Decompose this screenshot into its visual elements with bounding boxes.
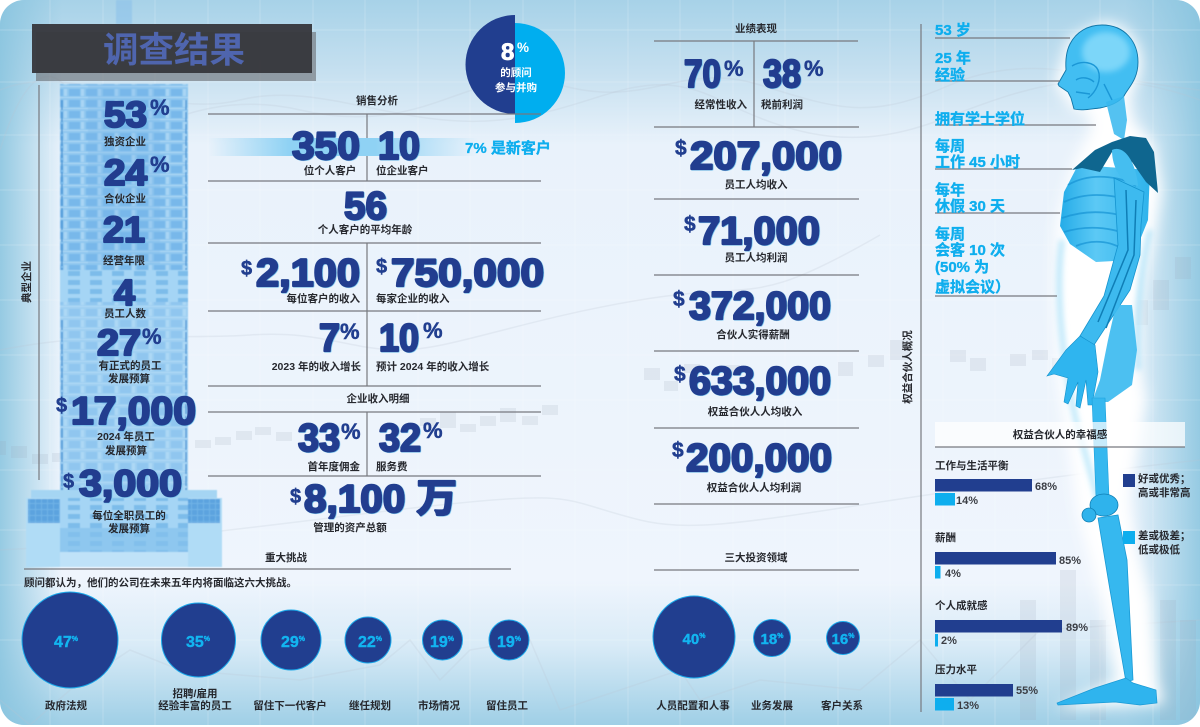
stat: $2,100 per client: 2,100: [256, 252, 360, 295]
foot: [1057, 678, 1157, 705]
panel: top challenges: 重大挑战: [265, 551, 307, 564]
bars: personal fulfilment: 2%: [941, 635, 957, 647]
stat: $8.1M AUM: 8,100 万: [304, 478, 457, 521]
stat: $3,000: 每位全职员工的: [92, 509, 166, 522]
callout: 8% M&A circle: 的顾问: [500, 66, 532, 79]
stat: $633,000: 权益合伙人人均收入: [708, 405, 803, 418]
stat: $17,000: $: [56, 395, 67, 417]
stat: 33% first-year commission: %: [341, 419, 361, 444]
bubble: 40% staffing: 40: [683, 631, 699, 648]
stat: $750,000 per firm: 每家企业的收入: [376, 292, 450, 305]
bubble: 19% market: 市场情况: [418, 699, 460, 712]
bubble: 22% succession: [345, 617, 391, 712]
legend: negative: 差或极差；: [1138, 529, 1190, 542]
stat: 53% sole: 53: [104, 94, 147, 135]
bubble: 22% succession: %: [376, 636, 383, 643]
head: [1058, 25, 1138, 110]
stat: 32% fees: 32: [379, 417, 421, 460]
stat: $750,000 per firm: 750,000: [391, 252, 544, 295]
callout: 8% M&A circle: 8: [501, 39, 514, 66]
ribs: [1062, 177, 1138, 252]
bubble: 16% client relations: 16: [832, 631, 848, 648]
bubble: 19% market: %: [448, 636, 455, 643]
stat: 27% budget: 有正式的员工: [98, 359, 162, 372]
stat: 56 average age: [318, 185, 413, 236]
panel: top investment areas: 三大投资领域: [724, 551, 788, 564]
stat: $2,100 per client: $: [241, 258, 252, 280]
stat: 70% recurring: [684, 53, 747, 111]
panel: sales analysis: [208, 94, 551, 534]
stat: $372,000: 合伙人实得薪酬: [716, 328, 790, 341]
bubble: 19% market: [418, 620, 462, 712]
stat: $71,000: 71,000: [698, 210, 820, 253]
bubble: 47% regulation: 政府法规: [45, 699, 87, 712]
callout: 8% M&A circle: 参与并购: [495, 81, 537, 94]
stat: $207,000: 207,000: [690, 135, 842, 178]
stat: $200,000: $: [672, 439, 684, 462]
stat: 7% 2023 growth: 2023 年的收入增长: [272, 360, 361, 373]
legend: negative: 低或极低: [1138, 543, 1180, 556]
bubble: 35% hiring: [158, 603, 236, 712]
stat: $372,000: $: [673, 288, 685, 311]
fact: degree: 拥有学士学位: [935, 110, 1025, 128]
stat: $8.1M AUM: $: [290, 486, 301, 508]
stat: $207,000: $: [675, 137, 687, 160]
arm bones: [1098, 190, 1136, 328]
bubble: 19% staff retention: 留住员工: [486, 699, 528, 712]
bars: personal fulfilment: 89%: [1066, 622, 1088, 634]
callout: 8% M&A circle: [466, 15, 565, 123]
stat: $71,000: $: [684, 213, 696, 236]
bubble: 35% hiring: %: [204, 636, 211, 643]
bubble: 29% next generation: 29: [281, 634, 299, 651]
stat: $200,000: 权益合伙人人均利润: [707, 481, 801, 494]
fact: experience: 经验: [935, 66, 965, 84]
fact: meetings: (50% 为: [935, 259, 989, 276]
stat: 27% budget: 发展预算: [108, 372, 150, 385]
stat: 10% 2024 growth: [376, 317, 490, 373]
stat: 4 employees: 4: [114, 272, 135, 313]
stat: 70% recurring: 70: [684, 53, 721, 96]
bars: compensation: 薪酬: [935, 531, 956, 544]
panel: sales analysis: 销售分析: [356, 94, 398, 107]
panel: partner wellbeing: [935, 422, 1190, 712]
fact: experience: 25 年: [935, 49, 971, 67]
bars: work-life balance: 工作与生活平衡: [935, 459, 1009, 472]
stat: 70% recurring: %: [724, 56, 744, 81]
stat: 24% partnership: [104, 152, 170, 205]
stat: $2,100 per client: [241, 252, 360, 305]
stat: $2,100 per client: 每位客户的收入: [286, 292, 360, 305]
stat: 21 years: [103, 209, 145, 267]
panel: top investment areas: [653, 551, 863, 712]
bars: work-life balance: [935, 459, 1057, 507]
illustration: office tower: [26, 0, 222, 567]
stat: 4 employees: 员工人数: [104, 307, 146, 320]
bubble: 16% client relations: %: [848, 633, 855, 640]
stat: 33% first-year commission: 首年度佣金: [308, 460, 360, 473]
stat: $17,000: [56, 390, 196, 457]
fact: meetings: [935, 225, 1010, 296]
bars: work-life balance: 14%: [956, 495, 978, 507]
bubble: 18% business development: 18: [761, 631, 777, 648]
femur: [1092, 398, 1109, 497]
bubble: 19% staff retention: 19: [497, 634, 515, 651]
stat: 33% first-year commission: [298, 417, 361, 473]
legend: negative: [1123, 529, 1190, 556]
bubble: 47% regulation: 47: [54, 634, 72, 651]
stat: 32% fees: [376, 417, 443, 473]
stat: 53% sole: [104, 94, 170, 148]
bars: personal fulfilment: [935, 599, 1088, 647]
stat: 21 years: 21: [103, 209, 145, 250]
hand: [1047, 336, 1098, 408]
heading: revenue breakdown: 企业收入明细: [346, 392, 410, 405]
stat: $8.1M AUM: 管理的资产总额: [313, 521, 387, 534]
stat: $200,000: 200,000: [686, 437, 832, 480]
panel: top challenges: 顾问都认为，他们的公司在未来五年内将面临这六大挑战。: [24, 576, 297, 589]
fact: vacation: 休假 30 天: [935, 197, 1005, 215]
stat: 56 average age: 56: [344, 185, 387, 228]
bubble: 29% next generation: %: [299, 636, 306, 643]
stat: 10% 2024 growth: 预计 2024 年的收入增长: [376, 360, 490, 373]
illustration: human skeleton: [1047, 22, 1164, 708]
stat: 32% fees: 服务费: [376, 460, 408, 473]
legend: positive: [1123, 472, 1190, 499]
callout: 7% new clients: 7% 是新客户: [465, 139, 551, 157]
stat: $633,000: 633,000: [689, 360, 831, 403]
bars: compensation: 85%: [1059, 555, 1081, 567]
stat: $207,000: [675, 135, 842, 191]
stat: 38% pre-tax: 税前利润: [761, 98, 803, 111]
panel: equity partner profile: 权益合伙人概况: [901, 330, 914, 404]
stat: 7% 2023 growth: [272, 317, 361, 373]
bars: stress level: 55%: [1016, 685, 1038, 697]
stat: 7% 2023 growth: 7: [319, 317, 340, 360]
bars: compensation: 4%: [945, 568, 961, 580]
stat: $3,000: $: [63, 471, 74, 493]
bubble: 16% client relations: 客户关系: [821, 699, 863, 712]
stat: $17,000: 发展预算: [105, 444, 147, 457]
stat: $633,000: [674, 360, 831, 418]
stat: 32% fees: %: [423, 418, 443, 443]
stat: 7% 2023 growth: %: [340, 319, 360, 344]
bars: stress level: [935, 663, 1038, 712]
skull highlight: [1082, 32, 1130, 72]
bars: work-life balance: 68%: [1035, 481, 1057, 493]
stat: $71,000: [684, 210, 820, 264]
stat: 24% partnership: 24: [104, 152, 147, 193]
stat: 10% 2024 growth: %: [423, 318, 443, 343]
stat: 21 years: 经营年限: [103, 254, 145, 267]
panel: equity partner profile: [901, 21, 1096, 712]
stat: 38% pre-tax: 38: [763, 53, 801, 96]
stat: $372,000: [673, 285, 831, 341]
fact: hours: 工作 45 小时: [935, 154, 1020, 171]
stat: $372,000: 372,000: [689, 285, 831, 328]
bubble: 40% staffing: 人员配置和人事: [656, 699, 730, 712]
stat: 56 average age: 个人客户的平均年龄: [318, 223, 413, 236]
stat: $8.1M AUM: [290, 478, 457, 534]
neck and spine: [1106, 96, 1127, 140]
shoulder muscles: [1072, 136, 1158, 193]
bubble: 16% client relations: [821, 622, 863, 712]
panel: performance: [654, 22, 859, 504]
stat: 350 individual clients: 350: [292, 125, 360, 168]
bars: stress level: 13%: [957, 700, 979, 712]
bubble: 40% staffing: %: [699, 633, 706, 640]
bubble: 47% regulation: [22, 592, 118, 712]
stat: 10 corporate clients: [376, 125, 428, 177]
bars: stress level: 压力水平: [935, 663, 977, 676]
stat: 53% sole: 独资企业: [104, 135, 146, 148]
stat: $750,000 per firm: $: [376, 256, 387, 278]
panel: performance: 业绩表现: [735, 22, 777, 35]
stat: $207,000: 员工人均收入: [724, 178, 788, 191]
fact: age: 53 岁: [935, 21, 971, 39]
bubble: 19% market: 19: [430, 634, 448, 651]
bubble: 19% staff retention: [486, 620, 529, 712]
stat: 33% first-year commission: 33: [298, 417, 340, 460]
fact: hours: [935, 137, 1020, 171]
bubble: 35% hiring: 35: [186, 634, 204, 651]
fact: hours: 每周: [935, 137, 965, 155]
fact: meetings: 虚拟会议）: [935, 278, 1010, 296]
panel: typical firm: 典型企业: [20, 261, 33, 303]
stat: 38% pre-tax: [761, 53, 824, 111]
bars: personal fulfilment: 个人成就感: [935, 599, 988, 612]
stat: 38% pre-tax: %: [804, 56, 824, 81]
bubble: 22% succession: 22: [358, 634, 376, 651]
stat: $633,000: $: [674, 363, 686, 386]
shoulder joint: [1112, 149, 1138, 186]
face bones: [1072, 63, 1112, 100]
callout: 8% M&A circle: %: [517, 40, 529, 55]
stat: 70% recurring: 经常性收入: [694, 98, 747, 111]
stat: $200,000: [672, 437, 832, 494]
bubble: 18% business development: [751, 620, 793, 712]
fact: vacation: 每年: [935, 181, 965, 199]
bars: compensation: [935, 531, 1081, 580]
stat: 350 individual clients: 位个人客户: [304, 164, 356, 177]
arm: [1080, 178, 1144, 345]
stat: 10% 2024 growth: 10: [379, 317, 419, 360]
fact: experience: [935, 49, 971, 84]
bubble: 35% hiring: 经验丰富的员工: [158, 699, 232, 712]
stat: $3,000: 发展预算: [108, 522, 150, 535]
panel: typical firm: [20, 85, 196, 535]
knee: [1082, 494, 1118, 522]
title banner: [32, 24, 316, 81]
bubble: 35% hiring: 招聘/雇用: [173, 687, 217, 700]
stat: 10 corporate clients: 位企业客户: [376, 164, 428, 177]
stat: $3,000: [63, 463, 182, 535]
stat: $3,000: 3,000: [79, 463, 182, 504]
fact: vacation: [935, 181, 1005, 215]
stat: 4 employees: [104, 272, 146, 320]
stat: 27% budget: 27: [97, 322, 141, 363]
bubble: 19% staff retention: %: [515, 636, 522, 643]
bubble: 18% business development: 业务发展: [751, 699, 793, 712]
bubble: 40% staffing: [653, 596, 735, 712]
title banner: 调查结果: [103, 30, 245, 70]
stat: $17,000: 2024 年员工: [97, 430, 155, 443]
stat: 10 corporate clients: 10: [378, 125, 420, 168]
torso glow: [1059, 230, 1150, 500]
fact: meetings: 会客 10 次: [935, 241, 1005, 259]
fact: meetings: 每周: [935, 225, 965, 243]
bubble: 29% next generation: 留住下一代客户: [253, 699, 327, 712]
tibia: [1098, 515, 1133, 682]
panel: partner wellbeing: 权益合伙人的幸福感: [1013, 428, 1108, 441]
stat: 24% partnership: 合伙企业: [104, 192, 146, 205]
stat: 53% sole: %: [150, 95, 170, 120]
legend: positive: 好或优秀；: [1138, 472, 1190, 485]
pelvis: [1092, 305, 1137, 402]
stat: 27% budget: [97, 322, 162, 385]
stat: 27% budget: %: [142, 324, 162, 349]
stat: 24% partnership: %: [150, 152, 170, 177]
stat: $17,000: 17,000: [71, 390, 196, 433]
bubble: 29% next generation: [253, 610, 327, 712]
rib cage: [1060, 165, 1150, 262]
legend: positive: 高或非常高: [1138, 486, 1190, 499]
panel: top challenges: [22, 551, 529, 712]
stat: $750,000 per firm: [376, 252, 544, 305]
stat: $71,000: 员工人均利润: [724, 251, 788, 264]
bubble: 47% regulation: %: [72, 636, 79, 643]
bubble: 22% succession: 继任规划: [349, 699, 391, 712]
bubble: 18% business development: %: [777, 633, 784, 640]
